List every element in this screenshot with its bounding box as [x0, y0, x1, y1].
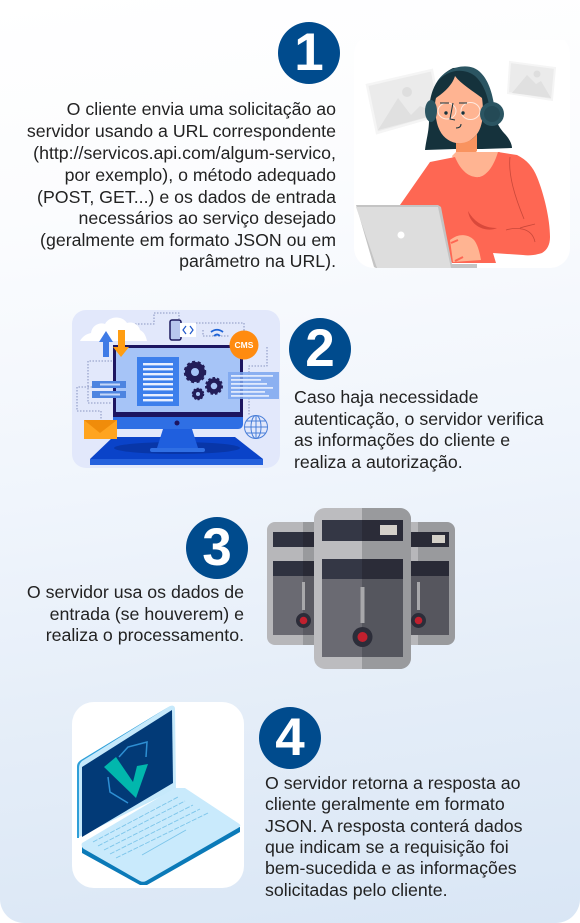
step 1 text: servidor usando a URL correspondente: [27, 121, 336, 141]
step 3 text: entrada (se houverem) e: [50, 604, 244, 624]
step 1 text: (http://servicos.api.com/algum-servico,: [33, 143, 336, 163]
step 3 badge: 3: [202, 518, 232, 577]
illustration: monitor with cloud, gears and CMS: CMS: [235, 340, 254, 350]
illustration: server towers: [267, 508, 455, 669]
step 3 text: O servidor usa os dados de: [27, 582, 244, 602]
step 2 badge: [289, 318, 351, 380]
step 4 text: cliente geralmente em formato: [265, 794, 505, 814]
step 3 badge: [186, 517, 248, 579]
illustration: monitor with cloud, gears and CMS: [72, 310, 280, 468]
step 1 badge: 1: [294, 23, 324, 82]
step 1 text: por exemplo), o método adequado: [65, 165, 336, 185]
step 2 text: [294, 387, 544, 472]
step 4 badge: 4: [275, 708, 305, 767]
step 1 text: O cliente envia uma solicitação ao: [67, 99, 336, 119]
step 2 text: Caso haja necessidade: [294, 387, 479, 407]
step 4 text: [265, 773, 523, 900]
step 4 badge: [259, 707, 321, 769]
step 1 badge: [278, 22, 340, 84]
step 3 text: [27, 582, 244, 645]
step 3 text: realiza o processamento.: [46, 625, 244, 645]
step 1 text: necessários ao serviço desejado: [78, 208, 336, 228]
step 1 text: [27, 99, 336, 271]
step 4 text: solicitadas pelo cliente.: [265, 880, 448, 900]
step 4 text: bem-sucedida e as informações: [265, 858, 517, 878]
step 1 text: parâmetro na URL).: [179, 251, 336, 271]
step 1 text: (geralmente em formato JSON ou em: [40, 230, 336, 250]
step 4 text: O servidor retorna a resposta ao: [265, 773, 521, 793]
step 2 text: as informações do cliente e: [294, 430, 510, 450]
step 2 text: autenticação, o servidor verifica: [294, 409, 544, 429]
step 4 text: JSON. A resposta conterá dados: [265, 816, 523, 836]
step 2 text: realiza a autorização.: [294, 452, 463, 472]
step 4 text: que indicam se a requisição foi: [265, 837, 509, 857]
illustration: laptop with shield check: [72, 702, 244, 888]
step 2 badge: 2: [305, 319, 335, 378]
illustration: woman with headset at laptop: [356, 61, 570, 268]
step 1 text: (POST, GET...) e os dados de entrada: [37, 187, 336, 207]
